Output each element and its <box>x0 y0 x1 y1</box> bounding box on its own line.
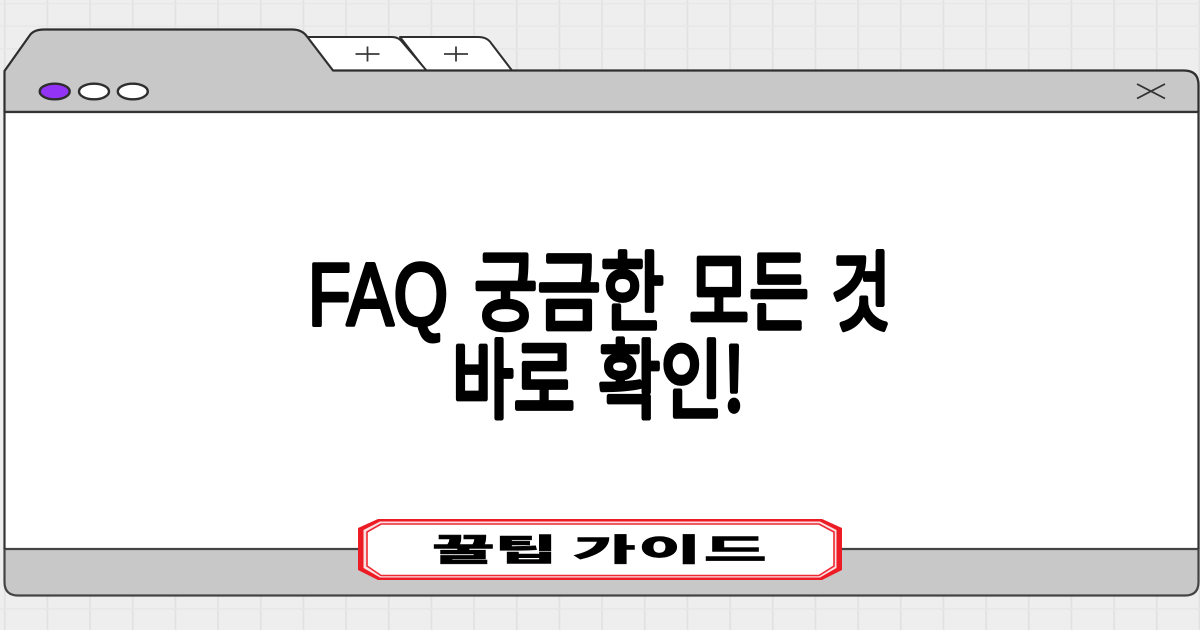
window header bar <box>4 30 1198 112</box>
window content area <box>5 112 1198 549</box>
dot: white right <box>118 84 148 99</box>
title line 1: 궁금한 <box>474 223 664 348</box>
badge label: 꿀팁 <box>432 526 557 570</box>
window control dots <box>40 84 148 99</box>
title line 1 <box>308 223 891 348</box>
back tabs <box>303 37 512 70</box>
title line 2: 바로 <box>452 311 575 436</box>
title <box>308 223 891 436</box>
icon: close X <box>1137 84 1165 98</box>
dot: purple <box>40 84 70 99</box>
title line 2: 확인! <box>598 311 745 436</box>
tab: second plus tab <box>400 37 512 70</box>
title line 2 <box>452 311 745 436</box>
title line 1: FAQ <box>308 245 448 344</box>
window footer bar <box>4 549 1198 596</box>
dot: white middle <box>79 84 109 99</box>
tab: first plus tab <box>303 37 426 70</box>
title line 1: 모든 <box>689 223 809 348</box>
badge: 꿀팁 가이드 <box>358 519 842 580</box>
badge label <box>432 526 767 570</box>
title line 1: 것 <box>831 223 891 348</box>
badge label: 가이드 <box>573 526 767 570</box>
